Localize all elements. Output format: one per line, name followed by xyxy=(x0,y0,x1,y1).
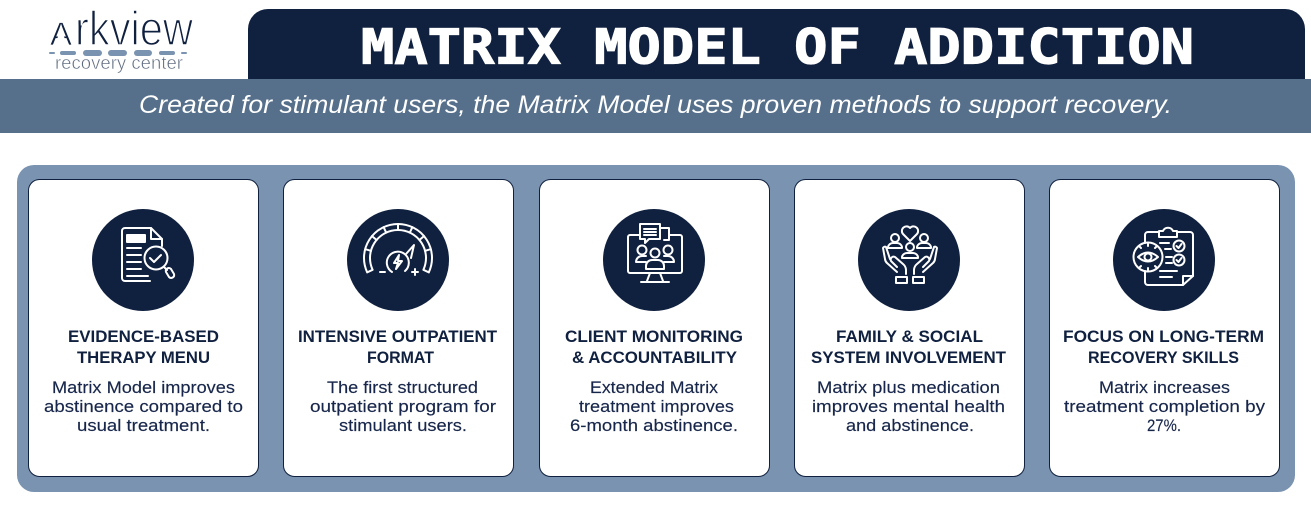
text: card 4 body: and abstinence. xyxy=(846,416,974,435)
heading: evidence-based therapy menu xyxy=(68,327,219,367)
card: family and social system involvement xyxy=(794,180,1024,476)
text: card 5 body: 27%. xyxy=(1147,416,1181,435)
text: card 3 body xyxy=(570,378,738,435)
heading: client monitoring: & ACCOUNTABILITY xyxy=(572,348,737,367)
icon: document with magnifier xyxy=(122,228,174,281)
heading: client monitoring xyxy=(565,327,743,367)
text: card 3 body: Extended Matrix xyxy=(590,378,719,397)
text: card 4 body: improves mental health xyxy=(812,397,1005,416)
text: card 3 body: treatment improves xyxy=(579,397,734,416)
icon: hands holding people and heart xyxy=(883,226,937,283)
text: card 5 body xyxy=(1064,378,1266,435)
icon: monitor with group and chat bubbles xyxy=(628,224,682,282)
logo: Arkview Recovery Center xyxy=(49,3,193,73)
text: card 2 body: stimulant users. xyxy=(339,416,467,435)
heading: focus on long-term: FOCUS ON LONG-TERM xyxy=(1063,327,1264,346)
icon: clipboard with eye xyxy=(1134,228,1193,285)
heading: focus on long-term xyxy=(1063,327,1264,367)
logo: Arkview Recovery Center: recovery center xyxy=(55,53,183,73)
card: focus on long-term recovery skills xyxy=(1050,180,1280,476)
subtitle band xyxy=(0,79,1311,133)
text: card 2 body: outpatient program for xyxy=(310,397,497,416)
heading: evidence-based therapy menu: THERAPY MENU xyxy=(77,348,210,367)
logo: Arkview Recovery Center: rkview xyxy=(75,3,193,56)
text: card 4 body: Matrix plus medication xyxy=(817,378,1000,397)
heading: focus on long-term: RECOVERY SKILLS xyxy=(1088,348,1239,367)
card: intensive outpatient format xyxy=(284,180,514,476)
text: card 3 body: 6-month abstinence. xyxy=(570,416,738,435)
text: card 2 body xyxy=(310,378,497,435)
heading: family and social: FAMILY & SOCIAL xyxy=(836,327,983,346)
card: evidence-based therapy menu xyxy=(28,180,258,476)
heading: client monitoring: CLIENT MONITORING xyxy=(565,327,743,346)
title banner xyxy=(248,9,1305,79)
subtitle band: Created for stimulant users, the Matrix Model uses proven methods to support recovery. xyxy=(139,91,1172,119)
text: card 1 body: abstinence compared to xyxy=(44,397,243,416)
card: client monitoring and accountability xyxy=(540,180,770,476)
text: card 5 body: Matrix increases xyxy=(1099,378,1230,397)
text: card 1 body xyxy=(44,378,243,435)
logo: Arkview Recovery Center: A xyxy=(50,16,73,52)
text: card 2 body: The first structured xyxy=(327,378,478,397)
heading: intensive outpatient format: INTENSIVE OUTPATIENT xyxy=(298,327,498,346)
heading: family and social: SYSTEM INVOLVEMENT xyxy=(811,348,1007,367)
text: card 5 body: treatment completion by xyxy=(1064,397,1266,416)
title banner: MATRIX MODEL OF ADDICTION xyxy=(361,20,1194,76)
heading: intensive outpatient format xyxy=(298,327,498,367)
text: card 4 body xyxy=(812,378,1005,435)
text: card 1 body: usual treatment. xyxy=(77,416,210,435)
heading: evidence-based therapy menu: EVIDENCE-BASED xyxy=(68,327,219,346)
heading: intensive outpatient format: FORMAT xyxy=(367,348,435,367)
heading: family and social xyxy=(811,327,1007,367)
text: card 1 body: Matrix Model improves xyxy=(52,378,235,397)
panel: five pillars background xyxy=(17,165,1295,492)
icon: gauge with lightning bolt xyxy=(364,224,432,275)
